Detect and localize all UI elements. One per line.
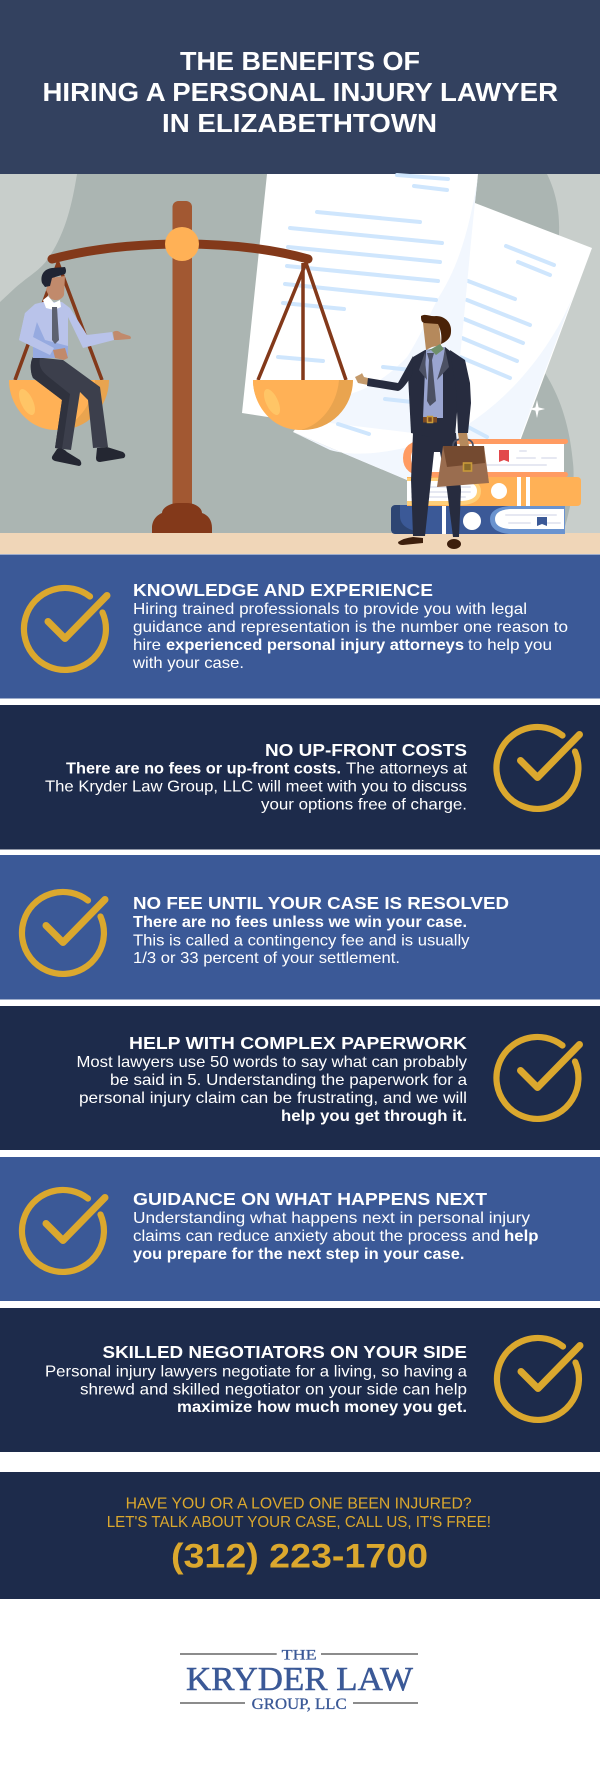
body text [132,600,568,672]
call to action text: HAVE YOU OR A LOVED ONE BEEN INJURED? [126,1496,472,1513]
body text: personal injury claim can be frustrating, and we will [79,1089,467,1107]
panel: help with complex paperwork [0,1006,600,1150]
body text: 1/3 or 33 percent of your settlement. [133,949,400,967]
icon: checkmark [22,892,105,974]
body text: The attorneys at [346,760,468,778]
icon: checkmark [24,588,107,670]
panel: no fee until resolved [0,855,600,1000]
body text [45,760,468,814]
body text: guidance and representation is the number one reason to [133,618,568,636]
icon: checkmark [497,1338,580,1420]
book: yellow [407,477,581,506]
body text: Understanding what happens next in personal injury [133,1209,531,1227]
book: blue [391,505,565,534]
icon: sparkle [529,400,545,418]
title: THE BENEFITS OF [180,48,420,76]
body text: The Kryder Law Group, LLC will meet with you to discuss [45,778,467,796]
body text: hire [133,636,161,654]
body text: be said in 5. Understanding the paperwork for a [110,1071,467,1089]
panel: guidance on what happens next [0,1157,600,1301]
paper: back sheet [293,203,592,495]
body text [45,1362,467,1416]
call to action text: LET'S TALK ABOUT YOUR CASE, CALL US, IT'S FREE! [107,1514,491,1531]
logo [180,1647,418,1713]
call to action panel [0,1472,600,1599]
left pan [9,380,109,430]
figure: client sitting on scale [19,267,131,466]
body text: with your case. [132,654,244,672]
panel: knowledge and experience [0,554,600,698]
body text: There are no fees unless we win your case. [133,913,467,931]
body text: help [504,1227,539,1245]
title: IN ELIZABETHTOWN [162,110,437,138]
heading: SKILLED NEGOTIATORS ON YOUR SIDE [102,1342,467,1362]
body text [133,913,470,967]
heading: HELP WITH COMPLEX PAPERWORK [129,1033,467,1053]
body text: your options free of charge. [261,796,467,814]
book: orange [403,439,568,477]
heading: NO UP-FRONT COSTS [265,740,467,760]
logo: THE [282,1647,317,1663]
heading: GUIDANCE ON WHAT HAPPENS NEXT [133,1189,487,1209]
body text [76,1053,468,1125]
phone number: (312) 223-1700 [171,1538,428,1576]
heading: KNOWLEDGE AND EXPERIENCE [133,580,433,600]
paper: front sheet [242,174,478,434]
heading: NO FEE UNTIL YOUR CASE IS RESOLVED [133,893,509,913]
body text: shrewd and skilled negotiator on your side can help [80,1380,467,1398]
right pan [253,380,353,430]
body text: help you get through it. [281,1107,467,1125]
header panel [0,0,600,174]
call to action text [107,1496,491,1531]
illustration: lawyer, client and scales [0,174,600,554]
scales of justice [9,201,353,533]
body text: you prepare for the next step in your case. [133,1245,464,1263]
icon: checkmark [496,727,580,809]
logo: GROUP, LLC [252,1696,347,1713]
panel: skilled negotiators [0,1308,600,1452]
title [42,48,558,138]
body text: Most lawyers use 50 words to say what can probably [76,1053,468,1071]
figure: lawyer with briefcase [355,315,489,549]
icon: checkmark [496,1037,580,1119]
logo: KRYDER LAW [186,1661,414,1698]
body text: Personal injury lawyers negotiate for a living, so having a [45,1362,467,1380]
body text [133,1209,539,1263]
floor [0,533,600,554]
books stack [391,439,581,534]
body text: There are no fees or up-front costs. [66,760,341,778]
body text: experienced personal injury attorneys [166,636,464,654]
body text: claims can reduce anxiety about the process and [133,1227,500,1245]
title: HIRING A PERSONAL INJURY LAWYER [42,79,558,107]
briefcase [437,433,489,487]
body text: to help you [468,636,552,654]
body text: Hiring trained professionals to provide you with legal [133,600,527,618]
icon: checkmark [22,1190,105,1272]
body text: maximize how much money you get. [177,1398,467,1416]
panel: no up-front costs [0,705,600,850]
body text: This is called a contingency fee and is usually [133,932,470,950]
